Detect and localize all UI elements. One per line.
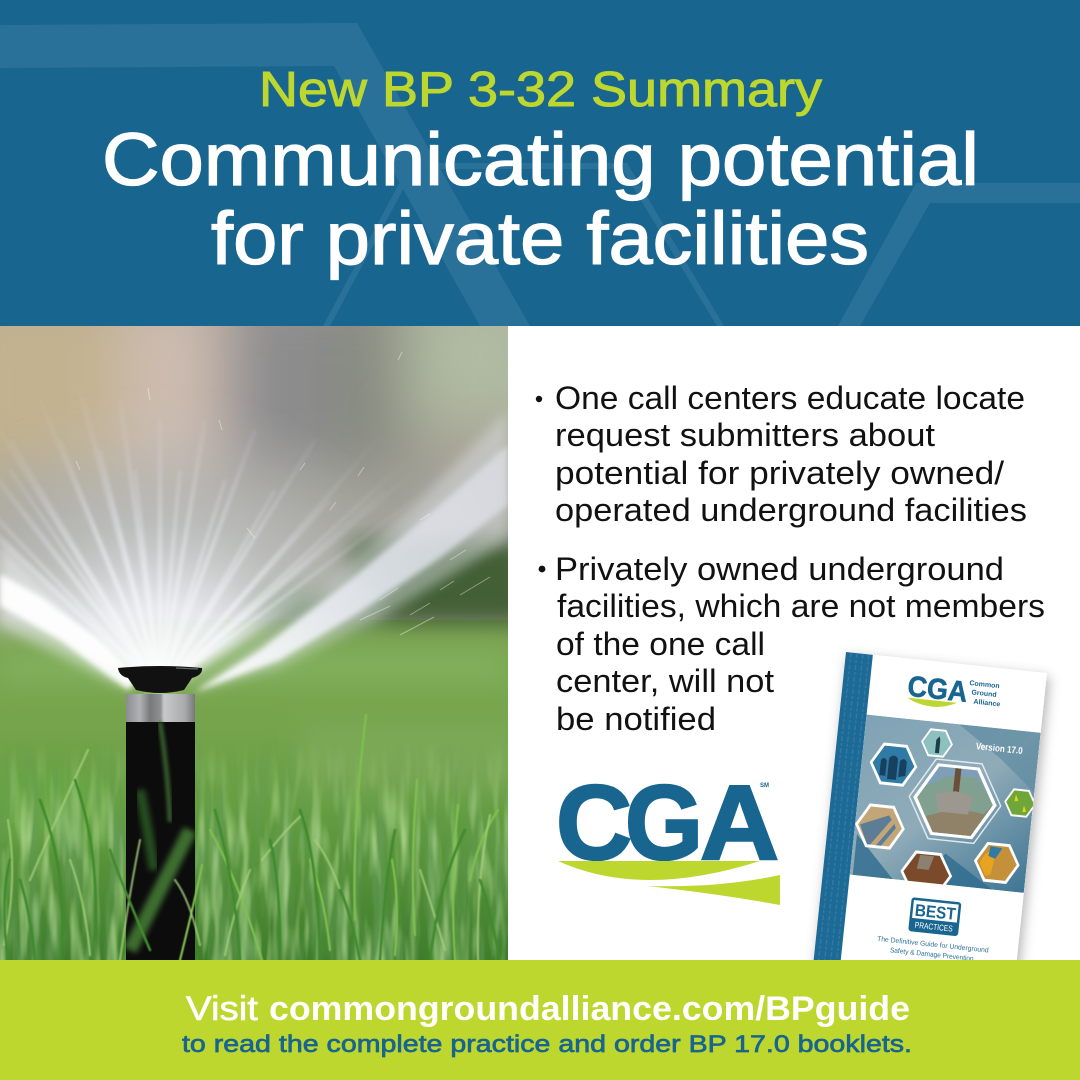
footer visit word: Visit: [186, 990, 259, 1028]
hex: pipeline: [855, 803, 905, 850]
booklet cover: [810, 650, 1056, 960]
left water stream: [0, 540, 140, 692]
booklet tagline: [876, 936, 989, 964]
booklet logo: Alliance: [973, 699, 1001, 708]
CGA logo: A: [700, 764, 779, 882]
hex: shovel: [905, 757, 1005, 846]
booklet logo: CGA: [906, 671, 969, 709]
grass blades: [4, 715, 500, 960]
hex: small person: [921, 728, 953, 758]
booklet sheet: [810, 652, 1047, 1011]
bullet one text: potential for privately owned/: [555, 455, 1005, 491]
footer band: [0, 960, 1080, 1080]
bullet two text: [555, 551, 1045, 737]
bullet two text: facilities, which are not members: [557, 588, 1045, 624]
booklet logo: [906, 671, 1003, 714]
hex: excavator: [900, 850, 952, 885]
best practices badge: PRACTICES: [914, 920, 953, 934]
booklet tagline: Safety & Damage Prevention: [890, 947, 974, 963]
CGA logo: SM: [760, 783, 769, 789]
CGA logo: C: [556, 764, 632, 882]
water spray fan: [0, 352, 508, 696]
bullet two text: of the one call: [556, 626, 765, 662]
CGA logo: [556, 764, 780, 905]
version label: Version 17.0: [975, 741, 1023, 757]
grass texture: [0, 740, 508, 960]
bullet one text: [555, 380, 1027, 528]
text block: bullet one: [536, 380, 1027, 528]
bullet two text: be notified: [556, 701, 716, 737]
hex: hard hat: [974, 842, 1020, 884]
bullet one text: One call centers educate locate: [555, 380, 1025, 416]
sprinkler body: [118, 666, 202, 965]
bullet two text: center, will not: [556, 663, 774, 699]
bullet one text: operated underground facilities: [555, 492, 1027, 528]
hex: team: [870, 742, 918, 787]
footer link: commongroundalliance.com/BPguide: [269, 990, 910, 1028]
heading: title: Communicating potential: [102, 118, 979, 201]
panel: text panel background: [508, 326, 1080, 960]
booklet logo: Ground: [971, 689, 997, 699]
booklet tagline: The Definitive Guide for Underground: [877, 936, 989, 955]
best practices badge: [908, 897, 961, 936]
heading: title: [102, 118, 979, 280]
best practices badge: BEST: [914, 901, 957, 924]
bullet marker two: [539, 566, 545, 572]
bullet one text: request submitters about: [555, 417, 935, 453]
booklet photo collage: [848, 714, 1044, 906]
panel: sprinkler photo: [0, 326, 508, 960]
bullet marker one: [536, 396, 542, 402]
header banner: [0, 0, 1080, 326]
booklet spine: [810, 652, 873, 993]
CGA logo: G: [625, 764, 703, 882]
text block: bullet two: [539, 551, 1045, 737]
booklet logo: Common: [969, 680, 1000, 690]
footer subline: to read the complete practice and order BP 17.0 booklets.: [182, 1031, 912, 1058]
right water stream: [190, 410, 508, 692]
hex: green flags: [1004, 788, 1034, 818]
bullet two text: Privately owned underground: [555, 551, 1004, 587]
heading: kicker: New BP 3-32 Summary: [259, 63, 823, 117]
heading: title: for private facilities: [211, 197, 869, 280]
droplets: [76, 352, 490, 635]
